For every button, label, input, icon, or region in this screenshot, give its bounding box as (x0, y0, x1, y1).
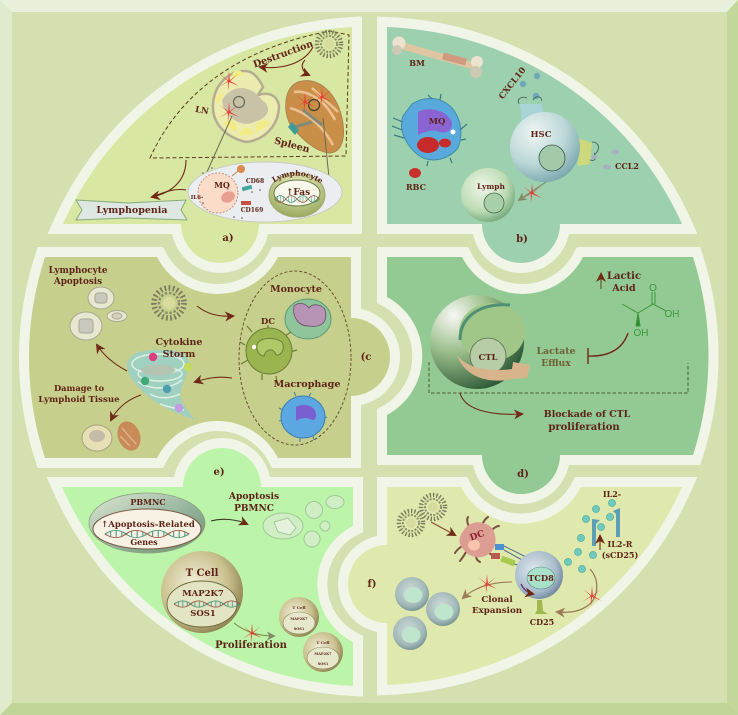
label a: a) (222, 233, 234, 244)
blocked proliferation arrow (234, 623, 274, 643)
daughter T cell 2: T Cell (316, 640, 330, 645)
small lymph node (82, 425, 112, 451)
panel a: lymph node and spleen destruction (48, 16, 362, 273)
CD25 receptor (535, 600, 548, 614)
label d: d) (517, 469, 529, 480)
panel b: bone marrow (387, 27, 682, 263)
apoptotic cells (70, 287, 127, 340)
arrow virus to cells (197, 306, 233, 316)
lactic acid molecule: OH (634, 328, 648, 339)
HSC receptor (518, 97, 544, 122)
fas label: ↑Fas (286, 188, 310, 198)
HSC cell (510, 112, 580, 182)
blocked IL2 arrow (557, 569, 602, 612)
lymphopenia ribbon: Lymphopenia (96, 205, 168, 216)
monocyte cell (285, 299, 331, 339)
LN label: LN (194, 105, 210, 117)
efflux arrow (457, 355, 530, 381)
CD68 label: CD68 (246, 178, 264, 185)
T cell label: T Cell (186, 568, 219, 579)
macrophage cell (279, 392, 327, 442)
Lymph label: Lymph (477, 182, 506, 191)
red x marks on lymph node (219, 71, 239, 122)
RBC label: RBC (406, 182, 426, 192)
TCD8 cell (515, 551, 563, 599)
inset ellipse (188, 162, 342, 222)
panel e: PBMNC and T cell (62, 448, 353, 686)
small spleen (114, 418, 144, 454)
CCL2 molecules (591, 150, 619, 170)
blocked arrow (519, 182, 546, 203)
panel f: clonal expansion (348, 487, 682, 685)
dendritic cell (240, 325, 297, 382)
HSC label: HSC (531, 130, 552, 140)
Lactate label: Lactate (536, 346, 576, 357)
icon: lymph node (213, 70, 279, 142)
Efflux label: Efflux (541, 358, 571, 369)
receptor complex (491, 544, 526, 566)
MQ label: MQ (429, 117, 446, 127)
apoptosis label: Apoptosis (228, 491, 279, 502)
daughter T cell 2: SOS1 (318, 662, 329, 666)
red x marks on spleen (295, 87, 332, 112)
leader lines (207, 116, 329, 178)
PBMNC label 2: PBMNC (234, 504, 274, 514)
Macrophage label: Macrophage (274, 379, 340, 390)
damage label line 2: Lymphoid Tissue (38, 395, 120, 405)
icon: viruses (399, 495, 445, 535)
BM label: BM (409, 58, 425, 68)
icon: spleen (286, 81, 344, 153)
lactic acid molecule: OH (664, 309, 680, 320)
TCD8 label: TCD8 (528, 573, 554, 583)
lactic acid molecule (622, 283, 680, 339)
damage label: Damage to (54, 383, 104, 393)
icon: red blood cell (409, 168, 421, 178)
daughter T cell 1: MAP2K7 (290, 617, 308, 621)
spleen label: Spleen (273, 135, 311, 155)
clonal T cells (393, 577, 460, 650)
daughter T cell 1 (279, 597, 319, 637)
daughter T cell 1: SOS1 (294, 627, 305, 631)
dashed bracket (429, 362, 688, 393)
label f: f) (367, 579, 377, 590)
PBMNC cell (89, 493, 205, 553)
daughter T cell 2: MAP2K7 (314, 652, 332, 656)
cytokine storm label: Cytokine (156, 337, 202, 348)
arrow to tissue (111, 395, 141, 420)
increase arrow (599, 536, 601, 550)
daughter T cell 2 (303, 632, 343, 672)
daughter T cell 1: T Cell (292, 605, 306, 610)
MQ label: MQ (214, 180, 230, 190)
apoptotic PBMNC fragments (263, 496, 344, 547)
IL2-R label: IL2-R (608, 539, 633, 549)
destruction arrows (260, 47, 313, 75)
genes label: ↑Apoptosis-Related (101, 520, 195, 530)
icon: virus (317, 32, 341, 56)
DC label: DC (469, 529, 486, 544)
label b: b) (516, 234, 528, 245)
CD25 label: CD25 (530, 617, 554, 627)
icon: virus (154, 288, 184, 318)
IL6 label: IL6- (191, 195, 203, 201)
panel d: lactic acid (387, 257, 709, 494)
CXCL10 molecules (520, 73, 540, 99)
lymphopenia ribbon (76, 200, 187, 220)
CD169 label: CD169 (241, 207, 263, 214)
inhibition line (588, 333, 628, 364)
lactic acid molecule: O (649, 283, 657, 294)
blocked clonal arrow (463, 574, 512, 598)
Lactic label: Lactic (607, 271, 641, 282)
arrow cells to storm (195, 377, 232, 382)
lymphocyte (461, 168, 515, 222)
tornado (127, 350, 195, 420)
macrophage (198, 165, 261, 219)
label e: e) (213, 467, 225, 478)
destruction label: Destruction (252, 39, 315, 70)
label c: (c (361, 352, 371, 363)
sCD25 label: (sCD25) (602, 550, 638, 560)
SOS1 label: SOS1 (190, 609, 216, 619)
arrow to blockade (460, 393, 522, 414)
dendritic cell (455, 517, 499, 562)
increase arrow (600, 274, 602, 289)
cytokine balls (141, 353, 192, 412)
panel c: cytokine storm (29, 257, 390, 458)
arrow virus to DC (431, 522, 455, 535)
IL2 receptor (592, 508, 620, 546)
lymphocyte curved label: Lymphocyte (272, 170, 322, 183)
CTL cell (430, 295, 525, 389)
apoptosis label: Lymphocyte (49, 266, 108, 276)
arrows to lymphopenia (152, 160, 186, 197)
CXCL10 label: CXCL10 (497, 66, 528, 102)
dashed ellipse (239, 271, 351, 445)
PBMNC label: PBMNC (130, 497, 166, 507)
Expansion label line 2: Expansion (472, 606, 523, 616)
arrow to apoptosis (97, 345, 127, 371)
apoptosis label line 2: Apoptosis (53, 277, 102, 287)
Acid label: Acid (611, 283, 636, 294)
Monocyte label: Monocyte (270, 284, 322, 295)
IL2 label: IL2- (603, 489, 621, 499)
genes label line 2: Genes (130, 537, 158, 547)
arrow to apoptosis (211, 519, 247, 524)
MAP2K7 label: MAP2K7 (182, 589, 224, 599)
blockade label: Blockade of CTL (544, 409, 631, 420)
T cell (161, 551, 243, 633)
lymphocyte nucleus (269, 173, 325, 217)
icon: bone (392, 36, 483, 78)
blockade label line 2: proliferation (548, 422, 620, 433)
DC label: DC (261, 317, 275, 327)
CCL2 label: CCL2 (615, 161, 639, 171)
Clonal Expansion label: Clonal (481, 595, 513, 605)
CCL2 receptor (578, 138, 598, 166)
cytokine storm label line 2: Storm (163, 349, 195, 360)
IL2 molecules (564, 499, 616, 573)
proliferation label: Proliferation (215, 640, 288, 651)
icon: macrophage with RBC (392, 94, 467, 166)
dashed region (150, 31, 349, 158)
CTL label: CTL (478, 353, 498, 363)
